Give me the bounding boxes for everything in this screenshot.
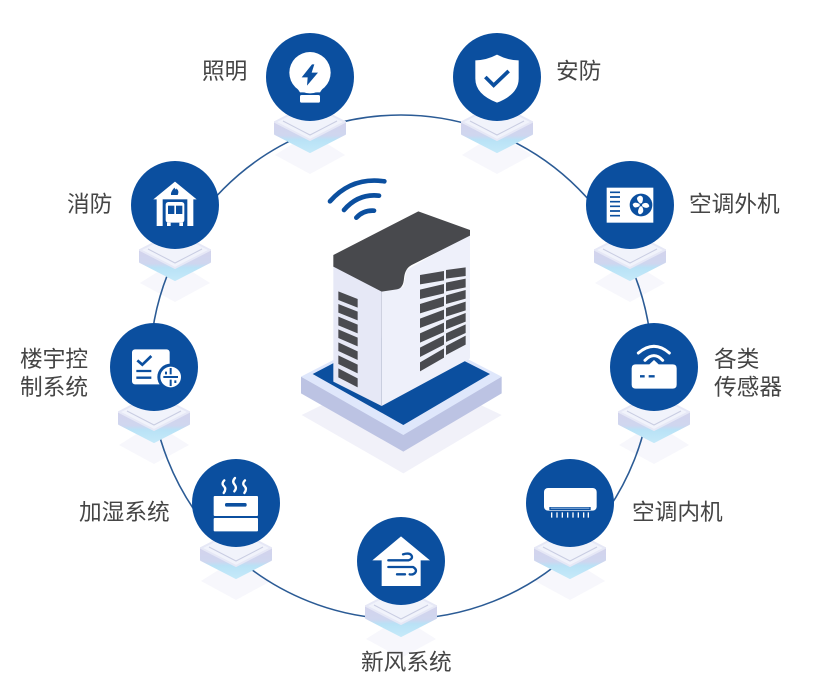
icon: shield [475, 55, 519, 103]
label: lighting: 照明 [202, 58, 247, 84]
icon: control panel [132, 349, 184, 390]
label: building control system [20, 346, 88, 400]
icon: fire station [153, 182, 197, 226]
base shadow [302, 367, 502, 473]
base platform [301, 325, 502, 452]
label: sensors: 各类 [714, 346, 759, 372]
label: humidifier: 加湿系统 [79, 499, 170, 525]
label: sensors: 传感器 [714, 374, 782, 400]
node: building control system [110, 323, 198, 442]
node: sensors [610, 323, 698, 442]
label: building control system: 制系统 [20, 374, 88, 400]
label: fire protection: 消防 [67, 191, 112, 217]
node: outdoor AC unit [586, 161, 674, 280]
node: indoor AC unit [526, 459, 614, 578]
label: sensors [714, 346, 782, 400]
icon: light bulb [289, 52, 331, 103]
label: fresh air system: 新风系统 [361, 649, 452, 675]
icon: house with wind [372, 536, 430, 586]
node: fresh air system [357, 517, 445, 636]
icon: router sensor [632, 346, 677, 389]
icon: outdoor AC [607, 188, 653, 223]
label: building control system: 楼宇控 [20, 346, 88, 372]
building body [333, 233, 470, 406]
pedestal shadows [119, 133, 689, 658]
icon: indoor AC [544, 488, 597, 518]
connection ring [150, 115, 652, 619]
label: outdoor AC unit: 空调外机 [689, 191, 780, 217]
node: humidifier [192, 459, 280, 578]
left vents [338, 291, 358, 387]
node: fire protection [131, 161, 219, 280]
icon: humidifier [214, 478, 258, 531]
node: lighting [266, 33, 354, 152]
label: indoor AC unit: 空调内机 [632, 499, 723, 525]
dark roof [333, 211, 470, 292]
wifi signal [330, 181, 384, 218]
right vents [420, 267, 466, 371]
central building unit [301, 181, 502, 473]
node: security [453, 33, 541, 152]
label: security: 安防 [556, 58, 601, 84]
